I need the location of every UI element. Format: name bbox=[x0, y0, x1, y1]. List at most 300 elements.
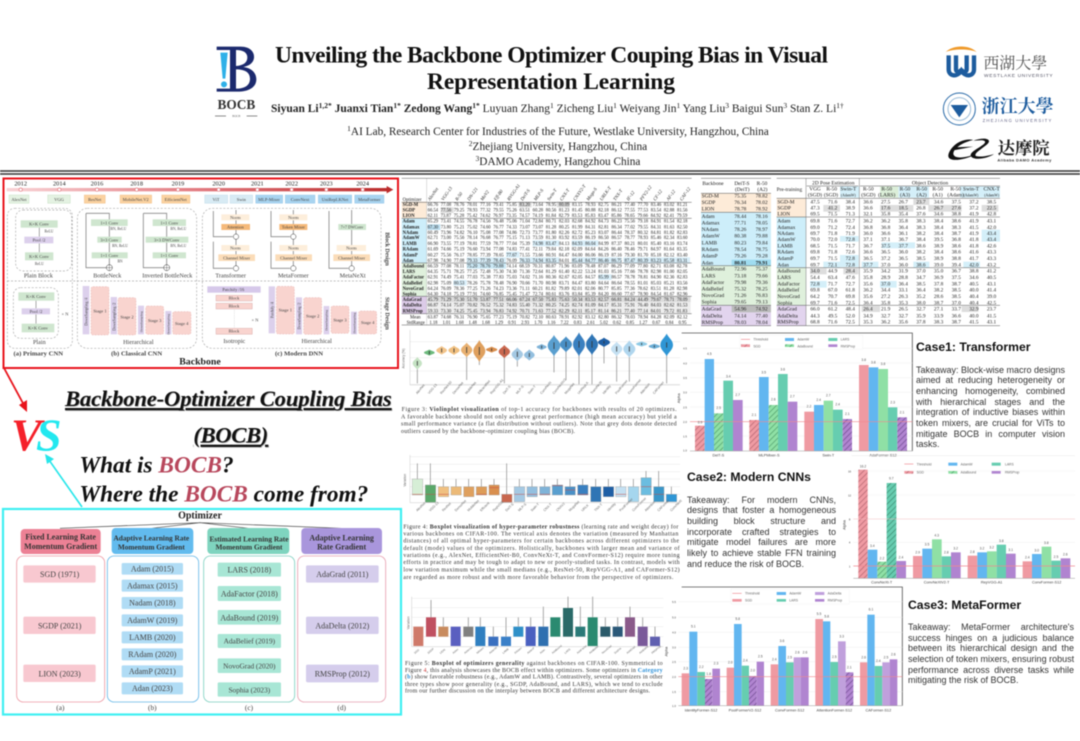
value labels: 2.5 bbox=[832, 655, 837, 659]
boxplot axis labels: CAFormer bbox=[657, 498, 671, 512]
column c: estimated learning rate: (c) bbox=[245, 703, 254, 712]
model chips: Swin bbox=[237, 197, 247, 202]
icon: Alibaba DAMO Academy logo: Alibaba DAMO Academy bbox=[997, 157, 1052, 162]
text block: Case 3 bbox=[908, 598, 1075, 686]
table rows: 62.91 74.49 75.41 77.03 75.38 77.83 75.03 74.02 71.16 80.36 82.67 82.05 84.57 85.99 86.57 78.78 78.81 84.90 82.36 82.83 bbox=[428, 275, 688, 280]
panel: modern DNN: Patchify /4 bbox=[270, 302, 274, 318]
value labels bbox=[860, 465, 1068, 561]
value labels: 3.6 bbox=[780, 367, 785, 371]
table rows: 76.34 78.02 bbox=[734, 200, 768, 206]
caption: figure 5 bbox=[405, 661, 663, 695]
table rows: AdaBound bbox=[777, 269, 801, 275]
chart: Case 1 transformer bars bbox=[677, 333, 912, 457]
x labels: Alpha bbox=[843, 519, 847, 530]
panel: modern DNN: Channel Mixer bbox=[223, 255, 251, 260]
value labels: 3.2 bbox=[953, 546, 958, 550]
boxplot axis labels: AdaBound bbox=[551, 643, 563, 655]
table rows: NAdam bbox=[702, 227, 719, 233]
boxplot axis labels: Swin-T bbox=[530, 502, 540, 512]
panel: modern DNN: × N bbox=[252, 317, 259, 322]
table header: R-50 bbox=[916, 187, 927, 193]
table rows: Adamax bbox=[403, 226, 420, 231]
x labels: 2.5 bbox=[683, 405, 687, 409]
boxplot axis labels: NAdam bbox=[475, 646, 485, 655]
table rows: 64.35 75.71 78.25 77.25 72.48 75.30 74.30 71.36 72.64 81.29 61.40 82.22 53.24 81.03 85.16 77.66 78.78 82.98 81.00 82.05 bbox=[428, 270, 688, 275]
table rows: 64.2 70.7 69.8 35.6 27.2 26.3 35.2 28.6 38.5 40.4 39.0 bbox=[810, 294, 997, 300]
table rows: Mean bbox=[410, 315, 421, 320]
panel: modern DNN: DownSampling bbox=[352, 312, 356, 333]
authors: 1 bbox=[676, 101, 680, 110]
text block: Case 2 bbox=[686, 470, 836, 569]
table rows: Backbone bbox=[702, 181, 724, 187]
table rows: (DeiT) bbox=[735, 186, 750, 193]
value labels: 16.2 bbox=[860, 465, 866, 469]
panel: primary CNN: × N bbox=[62, 311, 69, 316]
table header: R-50 bbox=[950, 187, 961, 193]
table header: Pre-training bbox=[777, 187, 802, 193]
text block: Case 2: mitigate model failures are more bbox=[687, 537, 836, 547]
table rows: LION bbox=[777, 212, 790, 218]
table rows: NovoGrad bbox=[702, 293, 724, 299]
table rows: NovoGrad bbox=[403, 287, 424, 292]
value labels: 2.7 bbox=[790, 395, 795, 399]
boxplot axis labels: DenseNet bbox=[454, 499, 467, 512]
value labels: 2.6 bbox=[771, 398, 776, 402]
table rows: AdaBound bbox=[403, 264, 425, 269]
table rows: DeiT-S bbox=[734, 181, 750, 187]
model chips: EfficientNet bbox=[165, 197, 187, 202]
legend bbox=[731, 589, 849, 604]
table rows: 69.0 71.2 72.4 36.8 36.8 36.4 38.3 38.4 38.3 41.5 42.0 bbox=[810, 225, 997, 231]
value labels: 2.3 bbox=[683, 666, 688, 670]
x labels: ConvNeXtV2-T bbox=[924, 580, 950, 584]
table header: MLP-S bbox=[533, 188, 546, 203]
value labels: 0.9 bbox=[698, 421, 702, 425]
table rows bbox=[403, 203, 688, 326]
x labels bbox=[677, 347, 897, 457]
panel: modern DNN: Norm bbox=[230, 246, 241, 251]
x labels: Swin-T bbox=[822, 453, 835, 457]
panel: modern DNN: Transformer bbox=[215, 273, 246, 280]
table header: R-50 bbox=[900, 187, 911, 193]
boxplot axis labels: Identity bbox=[606, 502, 617, 512]
boxplot axis labels: AdaBelief bbox=[588, 644, 600, 655]
legend: AdaDelta bbox=[828, 592, 842, 596]
boxplot axis labels: MobileNet bbox=[467, 499, 480, 512]
table rows: AdamW bbox=[403, 236, 420, 241]
panel: backbone diagram bbox=[4, 178, 398, 368]
panel: classical CNN bbox=[83, 213, 193, 357]
column d: adaptive learning rate gradient: AdaDelta (2012) bbox=[315, 621, 370, 630]
heading: Case1: Case1: Transformer bbox=[916, 340, 1030, 354]
table rows: Adan bbox=[777, 262, 789, 268]
value labels: 6.1 bbox=[869, 608, 873, 612]
heading: Backbone: Backbone bbox=[179, 356, 221, 367]
table: top-1 accuracy bbox=[402, 178, 693, 326]
x labels: 1 bbox=[849, 564, 851, 568]
table rows: 62.98 75.09 80.53 78.26 75.78 78.48 76.90 70.66 71.70 80.98 83.71 84.47 83.80 84.64 86.64 78.55 81.01 85.03 85.21 83.56 bbox=[428, 281, 688, 286]
caption: figure 3: Figure 3: Violinplot visualization of top-1 accuracy for backbones with results of 20 optimizers. bbox=[402, 406, 677, 413]
legend: AdaBound bbox=[797, 344, 813, 348]
value labels: 4.5 bbox=[707, 352, 712, 356]
boxplot axis labels: URLK bbox=[581, 503, 590, 512]
panel: modern DNN: Hierarchical bbox=[301, 339, 332, 345]
arrow: cyan to VS bbox=[45, 454, 82, 507]
table rows: 62.71 73.00 75.56 78.14 76.68 76.77 75.15 71.13 73.59 81.30 83.92 83.59 86.19 86.50 86.57 78.77 78.93 85.46 82.34 83.60 bbox=[428, 236, 688, 241]
panel: classical CNN: Stage 2 bbox=[120, 314, 134, 319]
icon: Westlake logo: WESTLAKE UNIVERSITY bbox=[984, 73, 1053, 79]
table rows: 34.0 44.9 28.4 35.9 34.2 31.9 37.0 35.0 36.7 38.8 41.2 bbox=[810, 269, 997, 275]
table rows: LAMB bbox=[403, 242, 417, 247]
panel: primary CNN: K×K Conv bbox=[28, 326, 49, 331]
panel: classical CNN: BN, ReLU bbox=[170, 227, 187, 232]
panel: classical CNN: BN, ReLU bbox=[170, 244, 187, 249]
table rows: AdamW bbox=[702, 234, 721, 240]
legend: RMSProp bbox=[1005, 471, 1020, 475]
table header: Object Detection bbox=[912, 180, 948, 186]
value labels: 2.5 bbox=[758, 655, 763, 659]
table rows: 69.8 71.6 72.7 36.2 36.2 35.8 38.3 38.4 38.6 41.9 43.1 bbox=[810, 218, 997, 224]
value labels: 2.4 bbox=[816, 398, 821, 402]
table rows: 47.3 41.2 38.9 36.6 17.6 18.5 26.8 26.7 27.6 37.2 22.5 bbox=[810, 206, 997, 212]
caption: figure 5: (b) show favorable robustness (e.g., AdamW and LAMB). Contrastively, several optimizers in other bbox=[405, 674, 663, 681]
authors: 1* bbox=[393, 101, 401, 110]
column a: fixed learning rate: (a) bbox=[56, 703, 65, 712]
bars bbox=[858, 470, 1070, 578]
legend: RMSProp bbox=[828, 599, 842, 603]
table rows: 66.54 77.56 79.25 78.93 77.32 79.55 75.26 63.51 60.28 80.56 81.23 81.45 80.88 82.18 86.12 77.55 77.53 83.54 82.88 81.56 bbox=[428, 208, 688, 213]
timeline: 2014 bbox=[53, 180, 66, 187]
column c: estimated learning rate: Sophia (2023) bbox=[228, 685, 271, 694]
arrow: red to VS bbox=[4, 368, 27, 412]
table rows: Adamax bbox=[777, 225, 796, 231]
icon: Alibaba DAMO Academy logo bbox=[948, 134, 1052, 162]
table rows: Sophia bbox=[702, 300, 717, 306]
value labels: 2.8 bbox=[970, 550, 975, 554]
x labels: ConvFormer-S12 bbox=[1032, 580, 1061, 584]
table header: (AdamW) bbox=[964, 194, 979, 198]
title bbox=[275, 42, 828, 95]
boxplot axis labels: Efficient bbox=[479, 501, 490, 512]
table rows: AdamP bbox=[403, 253, 418, 258]
boxplot axis labels: ConvNeXt bbox=[669, 499, 683, 512]
chart: hyper-parameter boxplot bbox=[403, 455, 683, 581]
value labels: 3.0 bbox=[1034, 548, 1039, 552]
x labels: 5.5 bbox=[672, 600, 676, 604]
affiliations: AI Lab, Research Center for Industries of the Future, Westlake University, Hangzhou, China bbox=[351, 126, 769, 138]
table rows: AdaFactor bbox=[702, 280, 724, 286]
affiliations: 2 bbox=[469, 139, 473, 148]
panel: primary CNN: Plain bbox=[33, 340, 46, 346]
table rows: 79.98 79.36 bbox=[734, 280, 768, 286]
table rows: RMSProp bbox=[777, 320, 799, 326]
BOCB question block bbox=[11, 386, 392, 508]
caption: figure 4: efforts in practice and may be tough to adapt to new or poorly-studied tasks. In contrast, models with bbox=[403, 559, 680, 566]
table rows: 73.18 79.66 bbox=[734, 273, 768, 279]
value labels: 2.4 bbox=[835, 403, 840, 407]
table rows: (A2) bbox=[757, 186, 768, 193]
table header: RVGG-A1 bbox=[506, 184, 522, 203]
timeline: 2012 bbox=[14, 180, 27, 187]
heading: Case2: Case2: Modern CNNs bbox=[687, 470, 811, 484]
table rows: AdaDelta bbox=[777, 313, 798, 319]
column b: adaptive learning rate momentum: Momentum Gradient bbox=[118, 542, 185, 551]
panel: primary CNN bbox=[14, 220, 69, 357]
table header: VGG bbox=[809, 187, 821, 193]
table rows: AdamW bbox=[777, 237, 796, 243]
icon: Alibaba DAMO Academy logo: 达摩院 bbox=[998, 134, 1050, 159]
table rows: AdaGrad bbox=[403, 298, 422, 303]
column d: adaptive learning rate gradient: RMSProp (2012) bbox=[315, 670, 370, 679]
text block: Case 3: mitigating the risk of BOCB. bbox=[908, 675, 1019, 685]
table rows: 69.7 72.1 72.8 37.7 37.0 36.0 38.6 39.0 39.4 42.0 43.2 bbox=[810, 262, 997, 268]
boxplot axis labels: Sophia bbox=[613, 646, 622, 655]
panel: classical CNN: 3×3 Conv bbox=[100, 237, 119, 242]
panel: classical CNN: 1×1 Conv bbox=[100, 253, 119, 258]
label: VS: S bbox=[36, 410, 62, 461]
logo: BOCB: BOCB bbox=[232, 114, 240, 118]
caption: figure 4: distances) of all optimal hyper-parameters for certain backbones across different optimizers to the bbox=[403, 538, 679, 545]
x labels bbox=[665, 600, 891, 712]
table rows: 59.33 73.30 74.25 75.45 73.94 76.83 74.92 70.71 71.63 77.52 82.29 82.11 85.17 81.14 86.21 77.40 77.14 84.01 79.72 81.83 bbox=[428, 309, 688, 314]
icon: Westlake logo: 西湖大學 bbox=[983, 50, 1047, 73]
value labels: 5.1 bbox=[691, 625, 696, 629]
text block: Case 1: mitigate BOCB in computer vision bbox=[916, 429, 1065, 439]
table header: CF-12 bbox=[653, 189, 664, 202]
table rows: AdaBelief bbox=[777, 287, 799, 294]
panel: modern DNN: (c) Modern DNN bbox=[275, 350, 323, 357]
x labels: 8 bbox=[849, 517, 851, 521]
table rows: StdRange bbox=[407, 321, 425, 326]
bars bbox=[695, 359, 907, 451]
panel: modern DNN bbox=[207, 210, 390, 357]
boxplot axis labels: Attention bbox=[644, 500, 656, 512]
panel: classical CNN: BN, ReLU bbox=[110, 227, 127, 232]
icon: Zhejiang University logo: ZHEJIANG UNIVERSITY bbox=[983, 118, 1051, 123]
caption: figure 3: small performance variance (a flat distribution without outliers). Note that grey dots denote detected bbox=[401, 421, 677, 428]
timeline bbox=[7, 180, 393, 193]
dashed group frames bbox=[7, 208, 392, 348]
boxplot axis labels: Adam bbox=[451, 647, 460, 655]
boxplot axis labels: Variation bbox=[406, 616, 410, 629]
column c: estimated learning rate: AdaBound (2019) bbox=[220, 613, 279, 622]
violin axis labels: Attention bbox=[639, 382, 651, 395]
table rows: Adan bbox=[403, 259, 414, 264]
value labels bbox=[683, 608, 896, 676]
authors: Baigui Sun bbox=[729, 103, 784, 115]
caption: figure 3 bbox=[401, 406, 677, 435]
table rows: 69.7 71.6 72.5 36.4 35.8 35.3 38.0 38.7 37.0 40.4 42.5 bbox=[810, 300, 997, 306]
panel: modern DNN: Attention bbox=[227, 225, 245, 230]
model chips bbox=[9, 195, 384, 203]
panel: modern DNN: Norm bbox=[288, 215, 299, 220]
authors: 1† bbox=[836, 101, 844, 110]
caption: figure 3: A favorable backbone should not only achieve great performance (high mean accuracy) but yield a bbox=[401, 413, 677, 420]
boxes bbox=[412, 478, 677, 502]
model chips: MobileNet.V2 bbox=[123, 197, 149, 202]
table rows: 68.8 71.6 72.5 35.3 36.2 35.6 37.8 38.3 38.7 41.5 43.1 bbox=[810, 320, 997, 326]
text block: Case 1: enhancing homogeneity, combined bbox=[916, 386, 1065, 396]
table rows: 80.23 79.84 bbox=[734, 240, 768, 246]
panel: classical CNN: DownSampling bbox=[139, 311, 143, 332]
x labels: 2.5 bbox=[672, 660, 676, 664]
caption: figure 4: low variation maximum while the small medians (e.g., ResNet-50, RepVGG-A1, and CAFormer-S12) bbox=[403, 567, 680, 574]
violin axis labels: VGG-13 bbox=[427, 383, 438, 395]
text block: Case 2: incorporate crafted strategies to bbox=[687, 527, 836, 537]
table header: (AdamW) bbox=[984, 194, 1000, 198]
x labels: 2.0 bbox=[672, 675, 676, 679]
panel: modern DNN: Channel Mixer bbox=[280, 255, 308, 260]
x labels: 3.5 bbox=[683, 376, 687, 380]
column c: estimated learning rate: Momentum Gradient bbox=[216, 543, 283, 552]
violin axis labels: UniRepLK bbox=[577, 380, 590, 395]
legend: Threshold bbox=[917, 462, 932, 466]
violin axis labels: RepVGG-A1 bbox=[489, 378, 505, 395]
violin medians bbox=[417, 341, 667, 366]
authors: 1 bbox=[613, 101, 617, 110]
table rows: 71.26 76.83 bbox=[734, 293, 768, 299]
x labels: 1.0 bbox=[672, 704, 676, 708]
table header: R-50 bbox=[826, 187, 837, 193]
table rows: LAMB bbox=[777, 243, 793, 249]
table rows: 64.30 74.18 75.19 77.91 74.60 76.85 75.45 71.47 72.74 80.61 83.76 83.84 85.39 84.20 86.60 77.67 78.90 84.54 81.67 82.96 bbox=[428, 292, 688, 297]
column a: fixed learning rate: SGD (1971) bbox=[40, 570, 80, 579]
column a: fixed learning rate: Momentum Gradient bbox=[24, 542, 97, 551]
table rows: 69.8 71.8 72.6 36.6 36.5 36.0 38.2 38.4 38.6 41.6 43.3 bbox=[810, 250, 997, 256]
boxplot axis labels: PoolFormer bbox=[619, 497, 634, 512]
value labels: 3.8 bbox=[999, 539, 1004, 543]
panel: modern DNN: Block bbox=[229, 329, 240, 334]
x labels: 4 bbox=[849, 541, 851, 545]
x labels: ConvFormer-S12 bbox=[775, 708, 804, 712]
table header: AF-12 bbox=[666, 189, 678, 203]
authors: Luyuan Zhang bbox=[480, 103, 550, 115]
x labels: AdaFormer-S12 bbox=[869, 453, 897, 457]
authors: Weiyang Jin bbox=[617, 103, 677, 115]
timeline: 2021 bbox=[251, 180, 264, 187]
value labels: 2.2 bbox=[880, 557, 884, 561]
value labels: 2.7 bbox=[735, 393, 740, 397]
panel: modern DNN: Isotropic bbox=[223, 339, 246, 345]
timeline: 2023 bbox=[320, 180, 333, 187]
heading: Backbone-Optimizer Coupling Bias: (BOCB) bbox=[193, 423, 268, 448]
table header: R-50 bbox=[932, 187, 943, 193]
column d: adaptive learning rate gradient: (d) bbox=[337, 703, 346, 712]
table rows: Adamax bbox=[702, 220, 720, 226]
table rows: 47.5 71.6 38.4 36.6 27.5 26.7 23.7 34.6 37.5 37.2 38.5 bbox=[810, 199, 997, 205]
text block: Case 1: Takeaway: Block-wise macro designs bbox=[916, 364, 1065, 374]
x labels: 12 bbox=[848, 493, 852, 497]
value labels: 3.2 bbox=[989, 546, 994, 550]
boxes bbox=[413, 608, 660, 646]
table rows: AdaFactor bbox=[403, 275, 424, 280]
column b: adaptive learning rate momentum: (b) bbox=[148, 703, 157, 712]
authors: Siyuan Li bbox=[271, 103, 319, 115]
panel: classical CNN: Stage 3 bbox=[148, 318, 162, 323]
value labels: 2.3 bbox=[890, 400, 895, 404]
panel: classical CNN: 1×1 Conv bbox=[160, 253, 179, 258]
column a: fixed learning rate: Fixed Learning Rate bbox=[25, 533, 96, 542]
violin axis labels: MobileNet bbox=[464, 381, 477, 395]
table rows: AdaBound bbox=[702, 267, 725, 273]
value labels: 2.7 bbox=[826, 394, 831, 398]
table rows: 78.03 78.04 bbox=[734, 320, 768, 326]
x labels: 5.0 bbox=[672, 616, 676, 620]
value labels: 2.1 bbox=[752, 413, 756, 417]
table rows: 1.18 1.01 1.68 1.48 1.68 1.29 0.91 2.93 1.70 1.16 7.22 0.83 2.61 5.02 0.62 0.85 1.27 0.67 0.84 0.95 bbox=[429, 321, 687, 326]
table rows: SGDP bbox=[403, 208, 415, 213]
table colour bands bbox=[402, 202, 691, 314]
table rows: 54.96 74.92 bbox=[734, 307, 768, 313]
violin axis labels: TransNeXt bbox=[590, 380, 603, 395]
column d: adaptive learning rate gradient bbox=[298, 528, 386, 712]
value labels: 2.4 bbox=[876, 659, 881, 663]
x labels: 1.5 bbox=[683, 434, 687, 438]
x labels: 4.0 bbox=[672, 631, 676, 635]
column b: adaptive learning rate momentum: RAdam (2020) bbox=[128, 650, 177, 659]
table header bbox=[777, 180, 1001, 199]
table rows: AdamP bbox=[777, 256, 793, 262]
table rows: RMSProp bbox=[403, 309, 423, 314]
panel: modern DNN: Block Design bbox=[384, 232, 390, 266]
table header: (SGD) bbox=[861, 192, 876, 199]
boxplot axis labels: AlexNet bbox=[415, 501, 426, 512]
table rows: AdaFactor bbox=[777, 281, 800, 287]
value labels: 2.1 bbox=[847, 665, 852, 669]
panel: modern DNN: Token Mixer bbox=[282, 225, 305, 230]
column b: adaptive learning rate momentum: Adamax (2015) bbox=[127, 581, 178, 590]
table rows: Sophia bbox=[777, 300, 793, 306]
boxplot axis labels: AdamP bbox=[526, 646, 535, 655]
table header: PFV2-12 bbox=[639, 185, 654, 203]
value labels: 5.5 bbox=[817, 612, 821, 616]
value labels: 2.6 bbox=[861, 655, 866, 659]
panel: modern DNN: Patchify /16 bbox=[222, 287, 245, 292]
boxplot axis labels: LARS bbox=[563, 647, 571, 655]
violin axis labels: ResNet-50 bbox=[439, 380, 453, 395]
value labels: 2.6 bbox=[891, 652, 896, 656]
column c: estimated learning rate: AdaFactor (2018) bbox=[221, 590, 278, 599]
model chips: VGG bbox=[54, 197, 65, 202]
table rows: 67.98 74.90 77.08 79.33 77.39 78.43 76.09 76.33 74.94 83.35 84.01 85.44 84.77 86.46 86.75 87.47 80.39 83.23 85.58 83.31 bbox=[428, 259, 688, 264]
table rows: LARS bbox=[702, 273, 715, 279]
table rows: SGD-M bbox=[702, 194, 719, 200]
violin axis labels: MLP-S bbox=[515, 384, 525, 395]
timeline: 2018 bbox=[130, 180, 143, 187]
table rows bbox=[777, 199, 997, 326]
legend: SGD bbox=[917, 471, 924, 475]
value labels: 3.8 bbox=[871, 360, 876, 364]
table rows: SGDP bbox=[777, 206, 791, 212]
text block: Case 3: Takeaway: MetaFormer architecture's bbox=[908, 622, 1074, 632]
table rows: 60.27 75.56 76.17 78.85 77.39 78.65 77.67 71.55 73.66 80.91 84.47 84.00 86.06 86.19 87.16 79.30 81.70 85.18 82.12 83.40 bbox=[428, 253, 688, 258]
table header: TNX-T bbox=[613, 189, 624, 202]
legend: SGD bbox=[745, 599, 753, 603]
value labels: 3.2 bbox=[980, 547, 984, 551]
text block: Case 1: aimed at reducing heterogeneity or bbox=[916, 375, 1065, 385]
value labels: 2.6 bbox=[803, 650, 807, 654]
x labels: RepVGG-A1 bbox=[981, 580, 1002, 584]
table rows: 60.49 73.96 74.82 76.10 75.08 77.08 74.86 72.73 73.77 81.80 82.26 82.72 85.23 83.07 86.44 78.37 80.32 84.81 81.82 82.83 bbox=[428, 231, 688, 236]
violin axis labels: Swin-T bbox=[527, 384, 537, 395]
column b: adaptive learning rate momentum: AdamW (2019) bbox=[127, 616, 178, 625]
violin axis labels: EfficientNet bbox=[477, 379, 491, 395]
table header: 2D Pose Estimation bbox=[812, 180, 855, 186]
x labels: ConvNeXt-T bbox=[871, 580, 893, 584]
x labels: DeiT-S bbox=[712, 453, 725, 457]
violin axis labels: MogaNet bbox=[564, 382, 575, 395]
icon: Zhejiang University logo: 浙江大學 bbox=[982, 93, 1054, 119]
